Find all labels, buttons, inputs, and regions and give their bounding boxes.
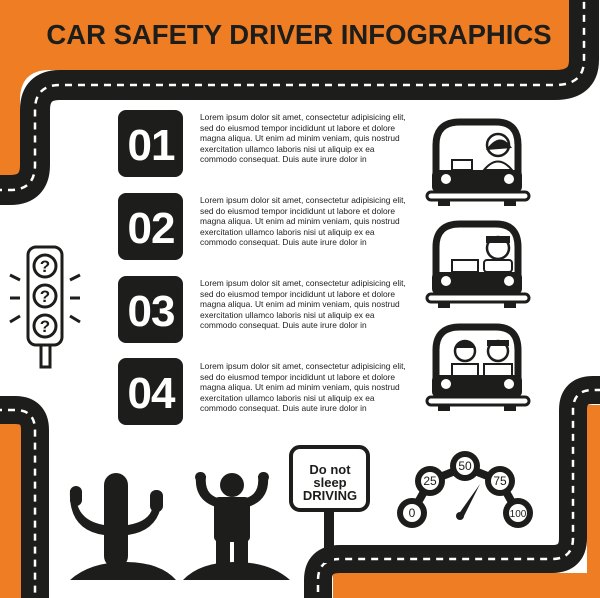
sign xyxy=(291,447,368,563)
sign: sleep xyxy=(313,475,347,490)
sign: DRIVING xyxy=(303,488,357,503)
road: bottom right xyxy=(318,390,600,598)
number boxes: 01 xyxy=(128,121,175,170)
number boxes xyxy=(118,110,183,425)
text block 4: Lorem ipsum dolor sit amet, consectetur adipisicing elit, sed do eiusmod tempor incididunt ut labore et dolore magna aliqua. Ut enim ad minim veniam, quis nostrud exercitation ullamco laboris nisi ut aliquip ex ea commodo consequat. Duis aute irure dolor in xyxy=(200,361,406,413)
number boxes: 04 xyxy=(128,369,176,418)
traffic light: ? xyxy=(40,257,50,276)
speedometer: 100 xyxy=(510,509,527,520)
speedometer: 50 xyxy=(458,459,472,473)
text block 3: Lorem ipsum dolor sit amet, consectetur adipisicing elit, sed do eiusmod tempor incididunt ut labore et dolore magna aliqua. Ut enim ad minim veniam, quis nostrud exercitation ullamco laboris nisi ut aliquip ex ea commodo consequat. Duis aute irure dolor in xyxy=(200,278,406,330)
text block 2: Lorem ipsum dolor sit amet, consectetur adipisicing elit, sed do eiusmod tempor incididunt ut labore et dolore magna aliqua. Ut enim ad minim veniam, quis nostrud exercitation ullamco laboris nisi ut aliquip ex ea commodo consequat. Duis aute irure dolor in xyxy=(200,195,406,247)
speedometer: 0 xyxy=(409,506,416,520)
road: bottom left xyxy=(0,410,35,598)
cactus xyxy=(70,473,176,580)
cars xyxy=(427,122,529,411)
speedometer: 75 xyxy=(493,474,507,488)
person xyxy=(183,472,290,580)
speedometer: 25 xyxy=(423,474,437,488)
text block 1: Lorem ipsum dolor sit amet, consectetur adipisicing elit, sed do eiusmod tempor incididunt ut labore et dolore magna aliqua. Ut enim ad minim veniam, quis nostrud exercitation ullamco laboris nisi ut aliquip ex ea commodo consequat. Duis aute irure dolor in xyxy=(200,112,406,164)
title: CAR SAFETY DRIVER INFOGRAPHICS xyxy=(46,19,552,50)
number boxes: 03 xyxy=(128,287,174,336)
traffic light: ? xyxy=(40,317,50,336)
traffic light xyxy=(10,247,80,367)
sign: Do not xyxy=(309,462,351,477)
speedometer xyxy=(397,451,533,528)
road: top xyxy=(0,0,584,190)
drivers xyxy=(452,160,472,170)
number boxes: 02 xyxy=(128,204,174,253)
traffic light: ? xyxy=(40,287,50,306)
